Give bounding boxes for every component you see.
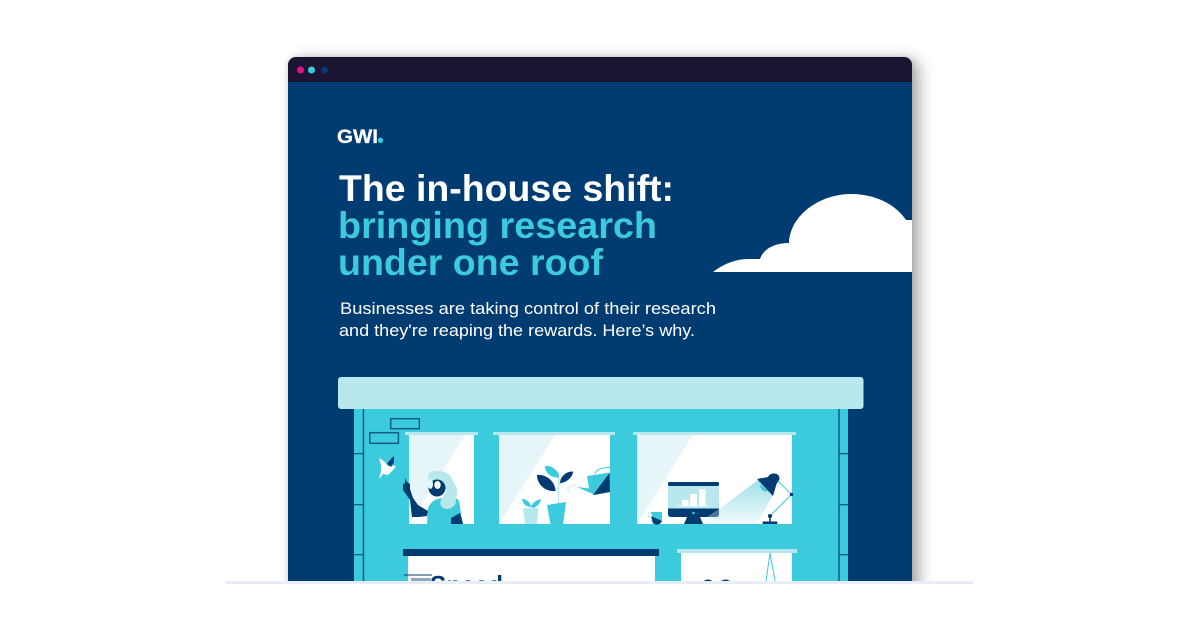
window 1 with person	[403, 432, 478, 524]
floor line	[225, 581, 973, 584]
browser window panel	[288, 57, 912, 597]
monitor	[668, 482, 719, 524]
logo: GWI: GWI	[337, 127, 378, 148]
title: under one roof	[338, 242, 604, 283]
icon: bird	[379, 456, 396, 479]
title	[338, 168, 674, 283]
cloud	[713, 194, 912, 272]
desk lamp	[757, 473, 793, 524]
lower left sign panel	[403, 549, 659, 600]
small plant	[522, 499, 541, 524]
speed heading	[404, 570, 503, 600]
page floor cover	[0, 581, 1200, 629]
title: The in-house shift:	[339, 168, 674, 209]
watering can	[577, 468, 610, 495]
building	[338, 377, 864, 600]
mug	[648, 512, 662, 525]
subtitle text: Businesses are taking control of their research	[340, 300, 716, 318]
building wall	[354, 405, 848, 581]
person	[403, 471, 463, 524]
window 2 with plants	[493, 432, 615, 524]
subtitle text	[339, 300, 716, 340]
subtitle text: and they're reaping the rewards. Here’s why.	[339, 322, 695, 340]
roof	[338, 377, 864, 409]
window 3 with desk	[633, 432, 796, 525]
water drops	[567, 485, 575, 492]
lower right panel	[677, 549, 797, 586]
bricks	[370, 419, 419, 443]
large plant	[537, 466, 573, 524]
browser title bar	[288, 57, 912, 82]
side wall lines	[354, 409, 848, 581]
title: bringing research	[338, 205, 657, 246]
